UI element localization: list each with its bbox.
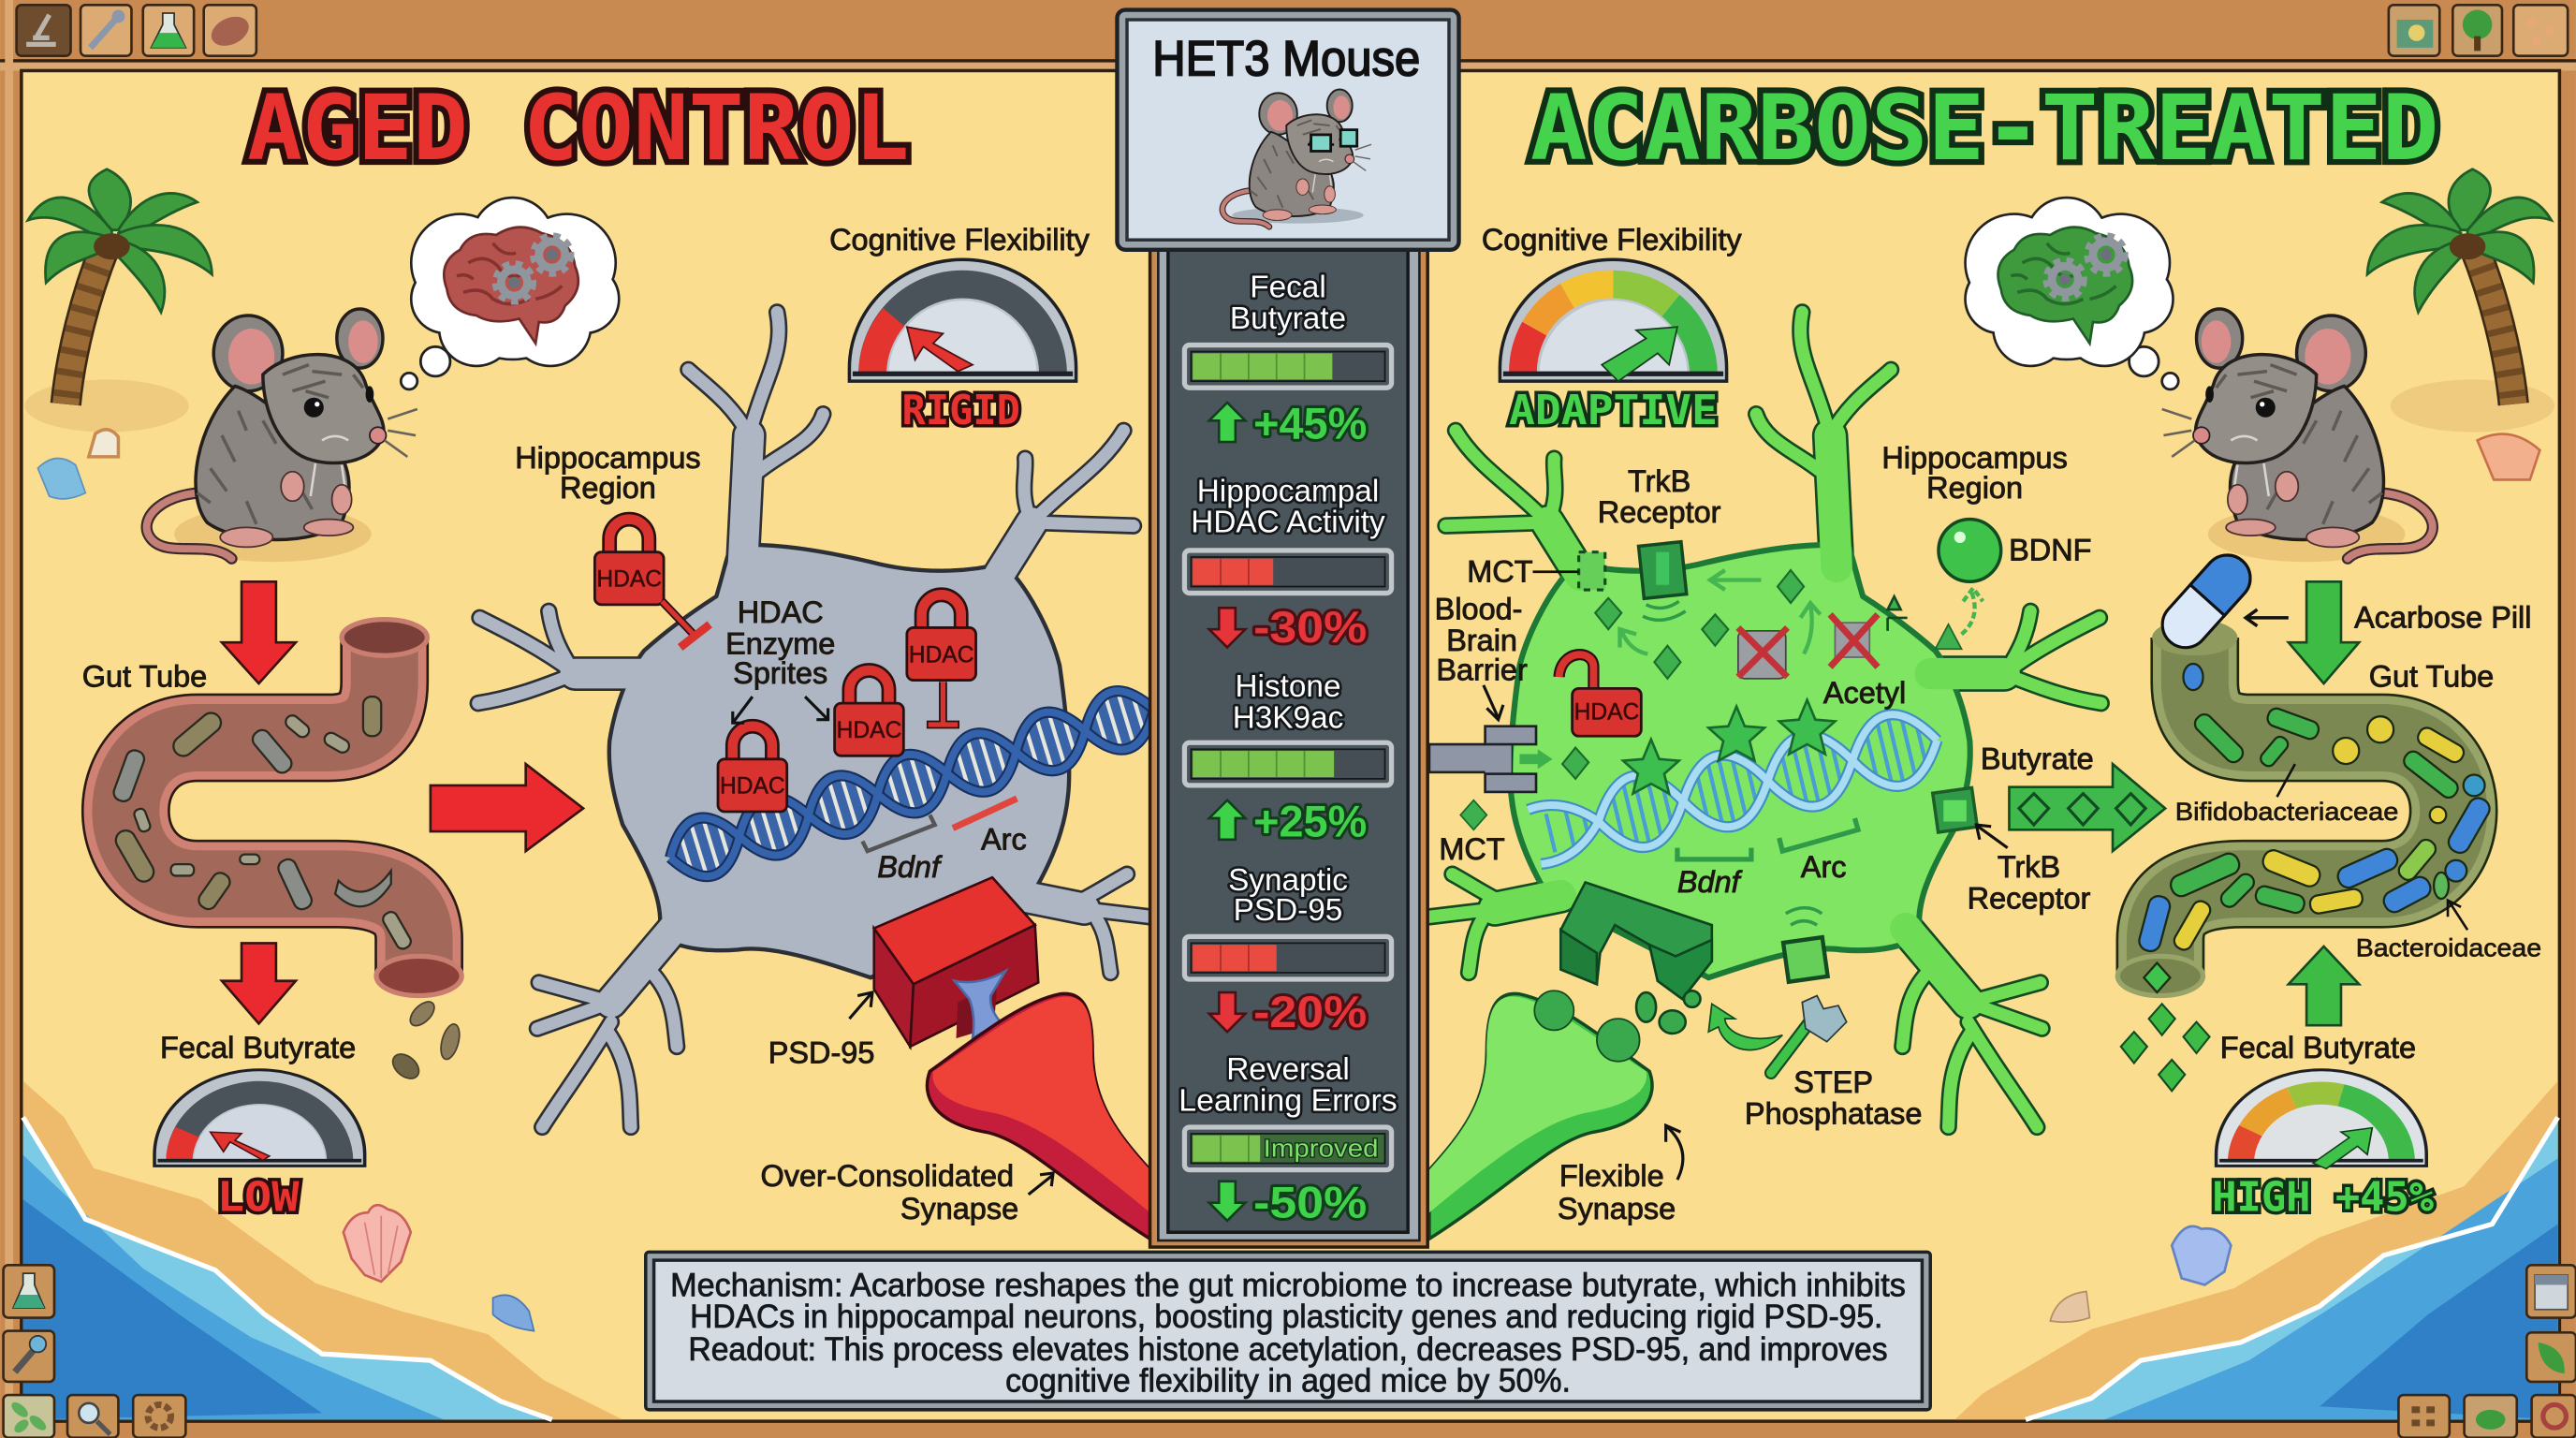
icon: microbes tile <box>2513 5 2568 56</box>
label: flexible synapse <box>1558 1125 1683 1225</box>
metric: synaptic psd-95 <box>1184 863 1392 1037</box>
icon: leaf tile <box>2526 1332 2576 1382</box>
label: blood-brain barrier: Barrier <box>1436 653 1528 687</box>
beach right <box>1955 1081 2558 1419</box>
icon: magnifier small <box>4 1331 54 1382</box>
label: acarbose pill: Acarbose Pill <box>2354 600 2531 634</box>
acetyl stars <box>1623 700 1835 794</box>
label: hippocampus region left <box>515 441 701 505</box>
toolbar: bottom right icons <box>2398 1265 2576 1438</box>
label: hippocampus region left: Region <box>560 471 656 505</box>
trkb receptor bottom <box>1783 908 1828 982</box>
bdnf ball with label <box>1888 520 2092 649</box>
palm tree left <box>24 169 212 433</box>
gene marks treated: Arc <box>1801 850 1846 884</box>
metric: histone h3k9ac: +25% <box>1253 797 1367 846</box>
mct dashed square <box>1579 552 1605 590</box>
label: mct lower <box>1439 800 1505 866</box>
icon: flask <box>143 5 194 56</box>
gene marks aged <box>862 799 1027 884</box>
label: hippocampus region right: Hippocampus <box>1881 441 2068 475</box>
gauge: cognitive flexibility adaptive: Cognitive Flexibility <box>1482 223 1742 257</box>
label: hippocampus region left: Hippocampus <box>515 441 701 475</box>
label: acetyl: Acetyl <box>1823 676 1906 710</box>
icon: microbe tile <box>2532 1395 2576 1438</box>
icon: flower gear <box>133 1395 185 1438</box>
icon: grid tile <box>2398 1395 2450 1438</box>
thought bubble: aged brain <box>401 198 618 389</box>
icon: flask small <box>4 1265 54 1318</box>
metric: hippocampal hdac activity: Hippocampal <box>1197 474 1379 508</box>
icon: calculator tile <box>2526 1265 2576 1318</box>
red arrow: gut to brain <box>431 764 583 851</box>
gauge: fecal butyrate low: LOW <box>217 1173 300 1221</box>
label: step phosphatase: STEP <box>1793 1065 1873 1099</box>
label: gut tube left: Gut Tube <box>82 660 207 694</box>
metric: fecal butyrate <box>1184 271 1392 449</box>
label: trkb receptor top <box>1598 464 1721 529</box>
hdac lock 1 with inhibitor <box>594 520 710 647</box>
label: over-consolidated synapse: Over-Consolidated <box>760 1159 1014 1193</box>
hdac lock 1 with inhibitor: HDAC <box>596 567 662 593</box>
label: blood-brain barrier: Brain <box>1446 624 1517 657</box>
title: acarbose-treated: ACARBOSE-TREATED <box>1530 75 2438 181</box>
butyrate arrow: Butyrate <box>1981 741 2094 775</box>
gut tube treated <box>2117 620 2493 996</box>
palm tree right <box>2367 169 2554 433</box>
hdac lock 2 with inhibitor: HDAC <box>909 642 973 668</box>
label: hippocampus region right: Region <box>1926 471 2023 505</box>
metric: histone h3k9ac <box>1184 669 1392 846</box>
label: hdac enzyme sprites <box>725 595 835 723</box>
toolbar: top right icons <box>2389 5 2568 56</box>
hdac lock 2 with inhibitor <box>907 594 976 725</box>
label: fecal butyrate left: Fecal Butyrate <box>160 1031 356 1064</box>
label: psd-95 <box>768 992 874 1070</box>
metric: hippocampal hdac activity: HDAC Activity <box>1191 506 1385 540</box>
label: blood-brain barrier: Blood- <box>1435 593 1522 626</box>
icon: tree <box>2452 5 2502 56</box>
label: bifidobacteriaceae <box>2175 764 2398 826</box>
panel: mechanism caption: cognitive flexibility in aged mice by 50%. <box>1005 1363 1571 1400</box>
gauge: cognitive flexibility adaptive: ADAPTIVE <box>1509 387 1718 434</box>
metric: fecal butyrate: Fecal <box>1250 271 1326 305</box>
inhibited hdac x marks <box>1738 614 1878 679</box>
green synapse <box>1429 990 1652 1239</box>
label: mct lower: MCT <box>1439 832 1505 866</box>
label: bacteroidaceae <box>2356 901 2541 961</box>
metric: reversal learning errors: Reversal <box>1226 1052 1350 1087</box>
label: hdac enzyme sprites: Sprites <box>733 656 827 690</box>
label: trkb receptor side: Receptor <box>1968 882 2091 916</box>
panel: het3 mouse header <box>1117 10 1459 250</box>
label: gut tube right: Gut Tube <box>2369 660 2494 694</box>
label: fecal butyrate right: Fecal Butyrate <box>2220 1031 2416 1064</box>
bdnf ball with label: BDNF <box>2009 533 2092 566</box>
label: blood-brain barrier <box>1435 593 1528 720</box>
label: step phosphatase: Phosphatase <box>1745 1096 1922 1130</box>
gene marks aged: Bdnf <box>877 850 943 884</box>
gauge: fecal butyrate low <box>154 1070 365 1221</box>
metric: synaptic psd-95: -20% <box>1253 988 1367 1037</box>
green psd-95 dissolving block <box>1560 882 1712 1034</box>
red arrow: to gut <box>222 581 296 683</box>
blood-brain barrier clamp <box>1429 726 1553 792</box>
trkb receptor top <box>1639 542 1687 620</box>
label: flexible synapse: Synapse <box>1558 1192 1676 1225</box>
label: hdac enzyme sprites: HDAC <box>738 595 824 629</box>
label: psd-95: PSD-95 <box>768 1036 874 1070</box>
butyrate diamonds outside gut <box>2121 1004 2210 1091</box>
label: mct upper <box>1467 554 1579 588</box>
shells <box>37 430 2539 1331</box>
butyrate diamonds <box>1562 570 1804 779</box>
label: trkb receptor side <box>1968 825 2091 916</box>
icon: microscope <box>17 5 71 56</box>
label: trkb receptor side: TrkB <box>1998 850 2060 884</box>
trkb receptor side <box>1933 787 1977 832</box>
butyrate arrow <box>1981 741 2165 851</box>
gauge: cognitive flexibility rigid <box>829 223 1090 434</box>
gene marks aged: Arc <box>981 822 1027 856</box>
metric: synaptic psd-95: Synaptic <box>1228 863 1348 898</box>
metric: reversal learning errors: -50% <box>1253 1178 1367 1227</box>
title: aged control: AGED CONTROL <box>247 75 909 181</box>
gut bacteria aged <box>111 697 413 951</box>
gauge: cognitive flexibility rigid: RIGID <box>902 387 1020 434</box>
toolbar: bottom left icons <box>4 1265 185 1438</box>
label: hdac enzyme sprites: Enzyme <box>725 627 835 661</box>
icon: magnifier <box>67 1395 118 1438</box>
gauge: fecal butyrate high: HIGH +45% <box>2212 1173 2435 1221</box>
panel: central metrics column <box>1150 243 1427 1247</box>
label: bacteroidaceae: Bacteroidaceae <box>2356 932 2541 961</box>
mouse left <box>147 309 417 562</box>
gauge: cognitive flexibility rigid: Cognitive Flexibility <box>829 223 1090 257</box>
open hdac lock <box>1559 654 1641 736</box>
panel: mechanism caption: Readout: This process elevates histone acetylation, decreases PSD-95, and improves <box>688 1331 1888 1368</box>
treated neuron interior <box>1559 542 1977 982</box>
green arrow: pill down <box>2289 581 2359 683</box>
panel: mechanism caption <box>646 1252 1930 1410</box>
neuron aged <box>478 312 1150 1127</box>
gauge: cognitive flexibility adaptive <box>1482 223 1742 434</box>
faint green arrows <box>1620 570 1821 654</box>
label: trkb receptor top: Receptor <box>1598 495 1721 529</box>
acarbose pill <box>2153 546 2260 657</box>
gauge: fecal butyrate high <box>2212 1070 2435 1221</box>
label: flexible synapse: Flexible <box>1559 1159 1664 1193</box>
droppings <box>388 997 462 1083</box>
hdac lock 3: HDAC <box>837 718 901 743</box>
gene marks treated <box>1677 818 1858 899</box>
red arrow: fecal butyrate down <box>222 943 296 1023</box>
metric: reversal learning errors <box>1178 1052 1398 1227</box>
metric: fecal butyrate: +45% <box>1253 400 1367 449</box>
panel: mechanism caption: Mechanism: Acarbose reshapes the gut microbiome to increase butyrate, which inhibits <box>670 1268 1906 1304</box>
open hdac lock: HDAC <box>1574 700 1639 726</box>
label: step phosphatase <box>1745 1065 1922 1130</box>
toolbar: top left icons <box>17 5 256 56</box>
hdac lock 4: HDAC <box>720 774 785 800</box>
hdac lock 4 <box>718 726 787 812</box>
metric: fecal butyrate: Butyrate <box>1230 301 1346 336</box>
metric: hippocampal hdac activity: -30% <box>1253 603 1367 653</box>
panel: mechanism caption: HDACs in hippocampal neurons, boosting plasticity genes and reducing rigid PSD-95. <box>690 1299 1882 1335</box>
label: trkb receptor top: TrkB <box>1628 464 1690 498</box>
neuron treated <box>1429 312 2101 1127</box>
icon: plants tile <box>2465 1395 2517 1438</box>
metric: reversal learning errors: Learning Errors <box>1178 1083 1398 1118</box>
heading: het3 mouse: HET3 Mouse <box>1152 32 1420 87</box>
green arrow: butyrate up <box>2289 946 2359 1025</box>
gut bacteria treated <box>2137 664 2493 992</box>
dna aged <box>662 682 1163 886</box>
metric: reversal learning errors: Improved <box>1264 1135 1379 1163</box>
hdac lock 3 <box>835 670 903 756</box>
metric: hippocampal hdac activity <box>1184 474 1392 653</box>
gene marks treated: Bdnf <box>1677 865 1743 899</box>
label: bifidobacteriaceae: Bifidobacteriaceae <box>2175 797 2398 826</box>
label: over-consolidated synapse <box>760 1159 1053 1225</box>
dna treated <box>1526 705 1945 872</box>
label: hippocampus region right <box>1881 441 2068 505</box>
icon: brain tile <box>204 5 256 56</box>
mouse right <box>2162 309 2433 562</box>
psd-95 block red <box>874 877 1038 1047</box>
icon: map <box>2389 5 2439 56</box>
label: mct upper: MCT <box>1467 554 1533 588</box>
label: acarbose pill <box>2246 600 2531 634</box>
metric: histone h3k9ac: Histone <box>1235 669 1341 704</box>
icon: leaf <box>4 1395 54 1438</box>
step phosphatase wrench <box>1771 996 1847 1073</box>
icon: wrench <box>80 5 131 56</box>
icon: mouse with glasses <box>1222 89 1371 227</box>
thought bubble: treated brain <box>1967 198 2178 389</box>
metric: synaptic psd-95: PSD-95 <box>1234 893 1342 928</box>
metric: histone h3k9ac: H3K9ac <box>1233 700 1343 735</box>
label: over-consolidated synapse: Synapse <box>900 1192 1018 1225</box>
over-consolidated synapse <box>927 993 1150 1239</box>
gut tube aged <box>111 620 462 1083</box>
beach left <box>23 1081 622 1419</box>
step arrow <box>1708 1004 1782 1050</box>
